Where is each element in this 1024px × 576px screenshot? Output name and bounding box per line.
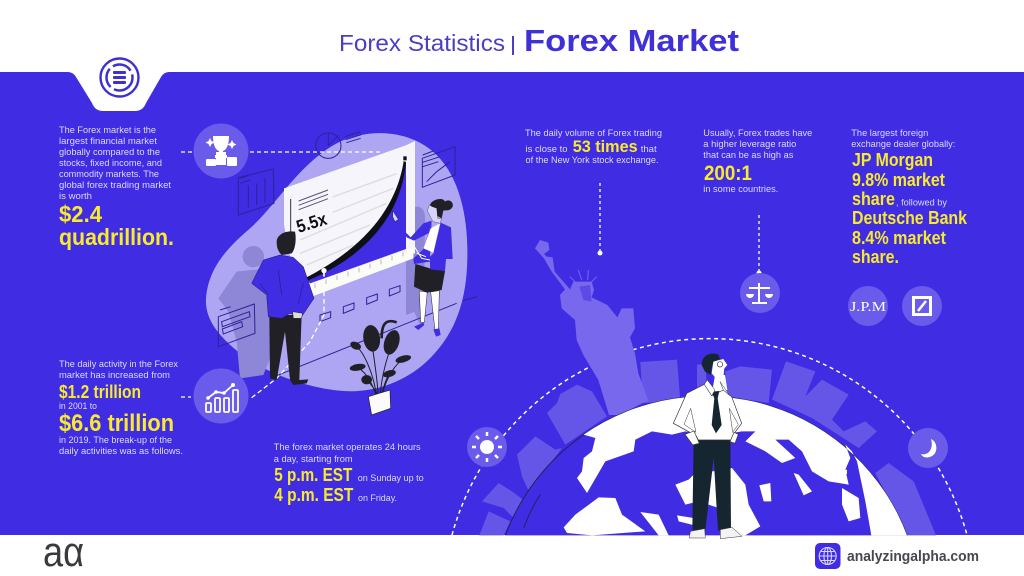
title — [339, 23, 739, 58]
legs — [692, 438, 731, 531]
text: daily volume: The daily volume of Forex trading — [525, 128, 662, 139]
text: leverage: that can be as high as — [703, 150, 793, 161]
man standing on globe — [673, 354, 742, 539]
text: forex market size: globally compared to the — [59, 147, 160, 158]
text: leverage: a higher leverage ratio — [703, 139, 796, 150]
footer logo: aα — [43, 528, 84, 575]
text: largest dealers: , followed by — [896, 198, 947, 208]
text: forex market size — [59, 125, 174, 250]
ruler — [310, 248, 413, 297]
shoes — [689, 527, 742, 539]
text: market hours — [274, 442, 424, 505]
dashed connector — [252, 292, 324, 398]
text: forex market size: quadrillion. — [59, 224, 174, 250]
man viewed from behind — [252, 231, 314, 385]
shirt and head — [673, 354, 742, 445]
text: daily volume: 53 times — [573, 137, 638, 156]
text: daily volume: of the New York stock exchange. — [526, 155, 658, 166]
icon: scales — [740, 273, 780, 313]
text: market hours: a day, starting from — [274, 454, 353, 465]
text: daily volume: is close to — [526, 144, 568, 155]
text: daily activity: in 2001 to — [59, 401, 97, 412]
text: leverage — [703, 128, 812, 195]
text: largest dealers: exchange dealer globally: — [851, 139, 955, 150]
shadows — [218, 207, 425, 378]
text: largest dealers: 9.8% market — [852, 170, 945, 190]
dashed connectors — [181, 152, 762, 397]
dashed day-night arc — [452, 339, 967, 535]
text: daily activity: $6.6 trillion — [59, 410, 174, 437]
text: forex market size: stocks, fixed income, and — [59, 158, 162, 169]
text: daily activity: market has increased from — [59, 370, 170, 381]
woman pointing at chart — [393, 199, 453, 337]
text: largest dealers: 8.4% market — [852, 228, 946, 248]
text: market hours: 4 p.m. EST — [274, 485, 353, 505]
text: largest dealers: The largest foreign — [851, 128, 928, 139]
text: largest dealers: Deutsche Bank — [852, 208, 968, 228]
footer website badge: analyzingalpha.com — [847, 548, 979, 565]
footer website badge — [815, 543, 979, 569]
text: daily activity: The daily activity in the Forex — [59, 359, 178, 370]
icon: sun — [467, 427, 507, 467]
text: forex market size: The Forex market is the — [59, 125, 156, 136]
text: daily activity — [59, 359, 183, 457]
text: leverage: in some countries. — [703, 184, 778, 195]
text: leverage: 200:1 — [704, 161, 752, 185]
icon: trophy — [194, 124, 248, 178]
city skyline around globe — [479, 360, 936, 535]
blob background — [206, 133, 467, 391]
text: forex market size: is worth — [59, 191, 92, 202]
statue of liberty — [535, 240, 648, 415]
text: market hours: The forex market operates 24 hours — [274, 442, 421, 453]
icon: Deutsche Bank — [902, 286, 942, 326]
text: forex market size: $2.4 — [59, 201, 102, 227]
text: largest dealers: share — [852, 189, 895, 209]
wire icons — [218, 132, 455, 347]
text: forex market size: largest financial market — [59, 136, 157, 147]
title: Forex Market — [524, 23, 739, 58]
text: daily activity: in 2019. The break-up of the — [59, 435, 172, 446]
globe — [505, 396, 907, 535]
chart board: 5.5x — [294, 209, 329, 237]
floor line and tags — [277, 286, 477, 376]
chart board — [284, 141, 415, 315]
icon: J.P. Morgan — [848, 286, 888, 326]
text: market hours: on Sunday up to — [358, 473, 424, 484]
text: largest dealers: JP Morgan — [852, 150, 933, 170]
text: largest dealers — [851, 128, 968, 267]
text: daily activity: daily activities was as follows. — [59, 446, 183, 457]
text: daily activity: $1.2 trillion — [59, 382, 141, 402]
icon: J.P. Morgan: J.P.M — [850, 299, 886, 314]
icon: moon — [908, 428, 948, 468]
text: leverage: Usually, Forex trades have — [703, 128, 812, 139]
plant — [349, 321, 412, 415]
icon: growth chart — [194, 368, 248, 424]
text: market hours: 5 p.m. EST — [274, 465, 352, 485]
text: daily volume: that — [641, 144, 657, 155]
text: forex market size: commodity markets. The — [59, 169, 159, 180]
text: largest dealers: share. — [852, 247, 899, 267]
logo tab with icon — [68, 58, 169, 111]
text: daily volume — [525, 128, 662, 166]
illustration: business people with chart — [206, 132, 477, 415]
land masses — [577, 396, 907, 535]
title: Forex Statistics — [339, 30, 505, 56]
text: forex market size: global forex trading market — [59, 180, 171, 191]
text: market hours: on Friday. — [358, 493, 397, 504]
